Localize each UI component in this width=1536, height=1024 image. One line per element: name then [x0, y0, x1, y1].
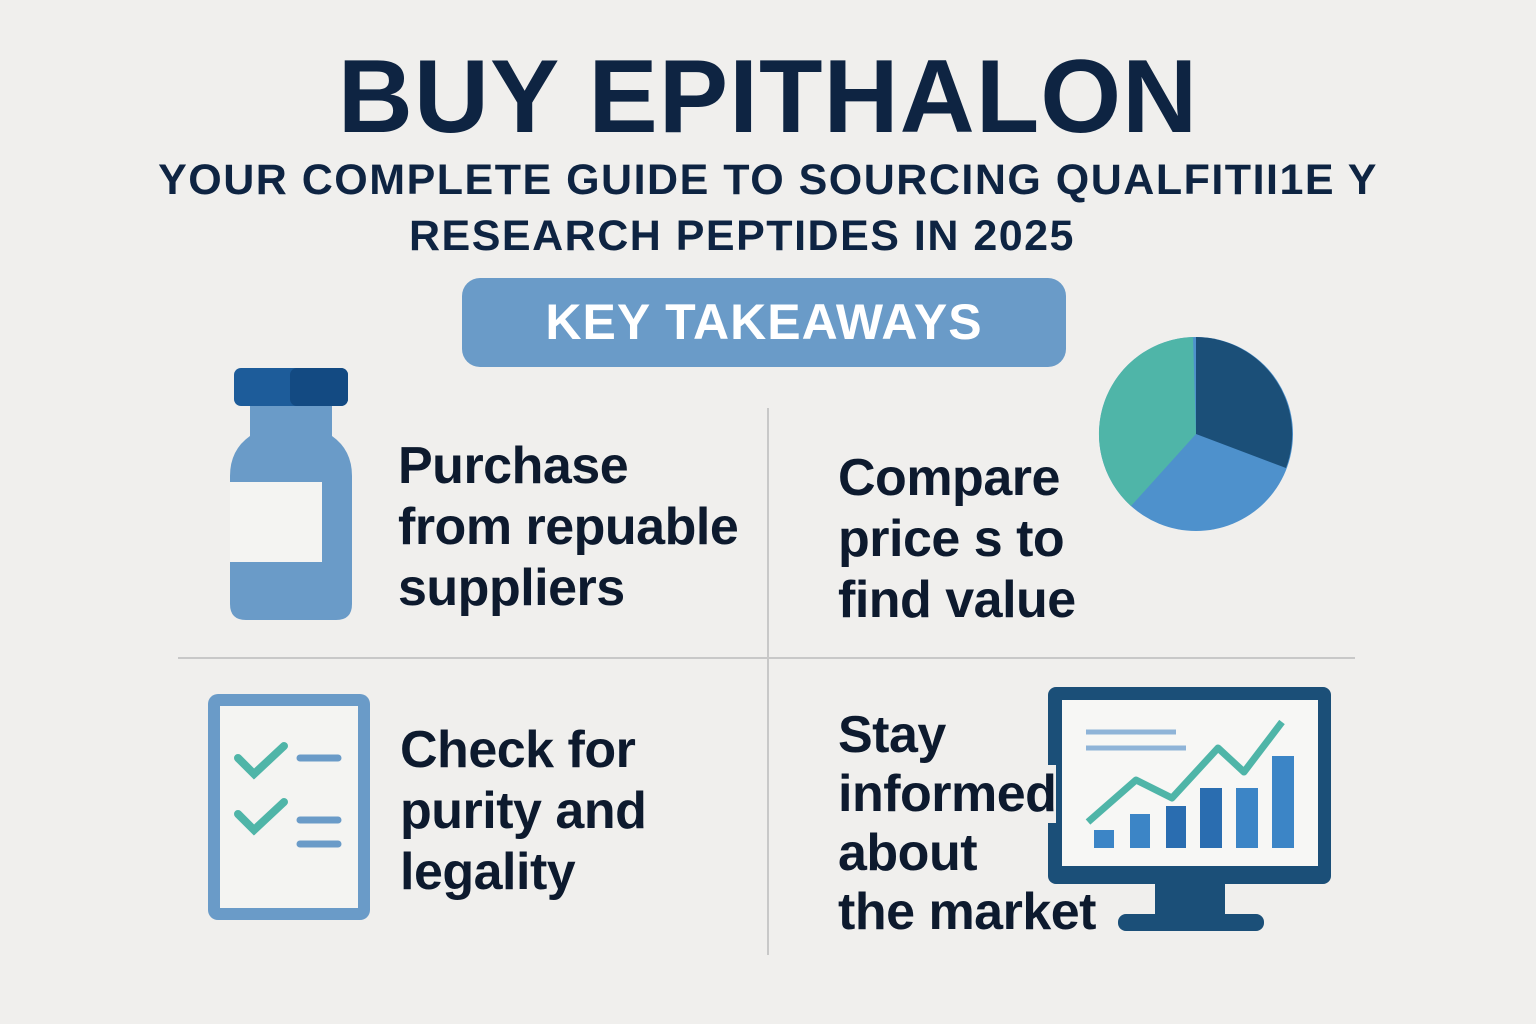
text: purchase: Purchase	[398, 437, 628, 495]
text: compare: Compare	[838, 449, 1060, 507]
title: BUY EPITHALON	[338, 39, 1198, 155]
text: check: Check for	[400, 721, 635, 779]
text: compare	[838, 449, 1076, 629]
text: purchase: from repuable	[398, 498, 738, 556]
text: check: purity and	[400, 782, 646, 840]
key takeaways banner	[462, 278, 1066, 367]
key takeaways banner: KEY TAKEAWAYS	[545, 294, 983, 350]
subtitle: RESEARCH PEPTIDES IN 2025	[409, 212, 1075, 260]
subtitle	[158, 156, 1378, 260]
text: check: legality	[400, 843, 575, 901]
text: stay informed: Stay	[838, 706, 946, 764]
text: stay informed: about	[838, 824, 977, 882]
icon: bottle	[230, 368, 352, 620]
icon: checklist	[208, 694, 370, 920]
text: purchase: suppliers	[398, 559, 625, 617]
text: compare: find value	[838, 571, 1076, 629]
icon: pie chart	[1098, 337, 1293, 531]
subtitle: YOUR COMPLETE GUIDE TO SOURCING QUALFITII1E Y	[158, 156, 1378, 204]
text: check	[400, 721, 646, 901]
icon: monitor chart	[1048, 687, 1331, 931]
text: purchase	[398, 437, 738, 617]
text: stay informed: the market	[838, 883, 1096, 941]
text: stay informed	[838, 706, 1096, 941]
text: stay informed: informed	[838, 765, 1056, 823]
text: compare: price s to	[838, 510, 1064, 568]
